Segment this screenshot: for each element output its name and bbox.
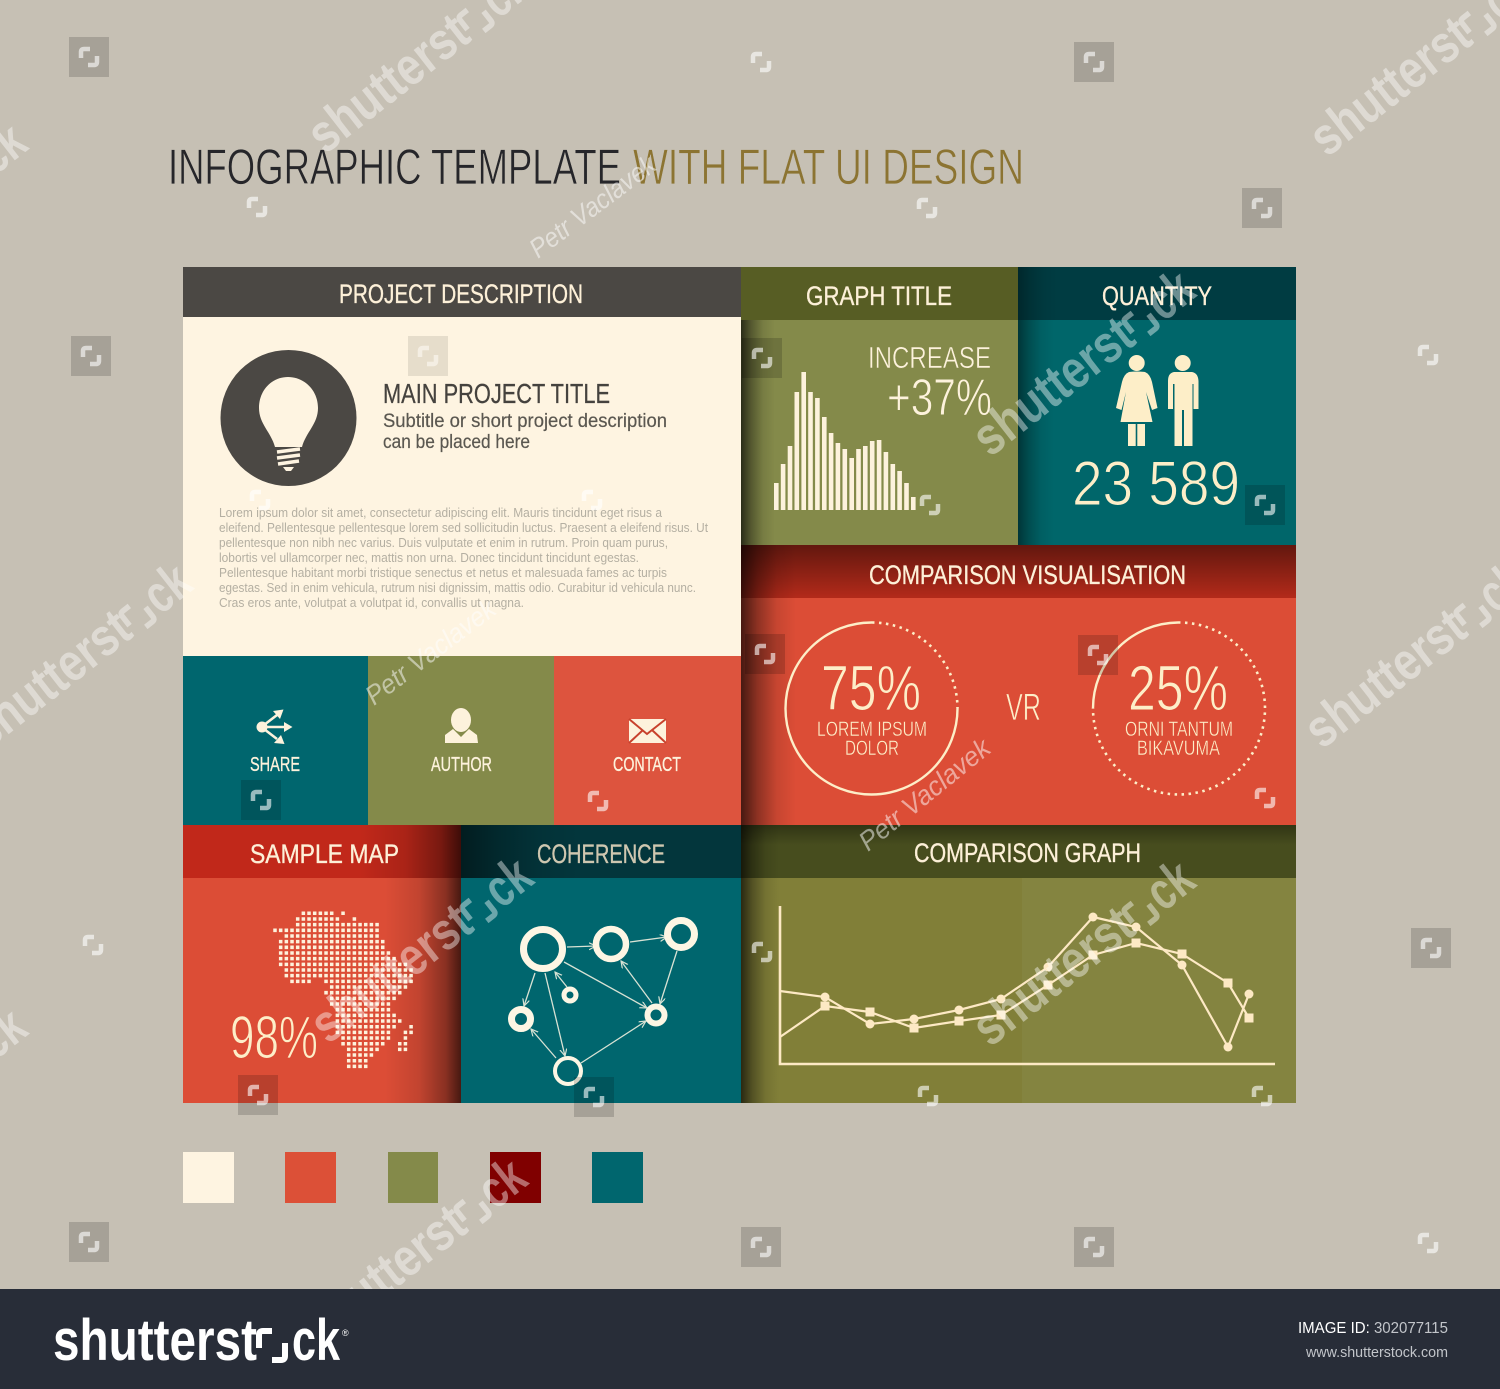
donut: 25 percent: BIKAVUMA [1137,737,1220,760]
panel: quantity [1018,267,1296,545]
watermark: diagonal wordmarks: Petr Vaclavek [524,149,662,264]
heading: project description [183,267,741,317]
panel: coherence [461,825,741,1103]
watermark: diagonal wordmarks: ck [131,551,203,625]
label: author: AUTHOR [431,754,492,776]
icon: author [445,708,478,743]
subtitle [383,411,667,453]
icon: envelope [629,719,666,743]
donut: 75 percent: 75% [821,652,921,724]
heading: comparison graph: COMPARISON GRAPH [914,838,1141,868]
body text: Cras eros ante, volutpat a volutpat id, convallis ut magna. [219,595,524,610]
donut: 75 percent [786,622,958,794]
body text [219,505,708,610]
body text: pellentesque non nibh nec varius. Duis vulputate et enim in rutrum. Proin quam purus, [219,535,668,550]
panel: project description: PROJECT DESCRIPTION [339,279,583,309]
footer bar [0,1289,1500,1389]
body text: Pellentesque habitant morbi tristique senectus et netus et malesuada fames ac turpis [219,565,667,580]
panel: project description [183,267,741,656]
footer logo: ® [342,1328,349,1338]
title: INFOGRAPHIC TEMPLATE [168,139,621,195]
label: versus: VR [1006,687,1041,729]
subtitle: can be placed here [383,432,530,453]
label: contact: CONTACT [613,754,681,776]
icon: woman and man [1116,355,1198,446]
watermark: diagonal wordmarks: Petr Vaclavek [853,732,997,857]
donut: 25 percent: ORNI TANTUM [1125,718,1233,741]
watermark: diagonal wordmarks: shutterst [961,895,1145,1057]
donut: 75 percent: LOREM IPSUM [817,718,927,741]
quantity number: 23 589 [1072,449,1240,519]
heading: sample map: SAMPLE MAP [250,839,399,869]
footer logo: shutterst [53,1308,257,1373]
watermark: diagonal wordmarks: ck [472,845,544,919]
panel: comparison graph [741,825,1296,1103]
body text: eleifend. Pellentesque pellentesque lorem sed sollicitudin luctus. Praesent a eleifend risus. Ut [219,520,708,535]
dotted map of africa [273,913,413,1066]
bar chart [774,372,916,510]
panel: author tile [368,656,554,825]
panel: sample map [183,825,461,1103]
line chart [780,906,1275,1064]
panel: graph title [741,267,1018,545]
heading: comparison visualisation: COMPARISON VISUALISATION [869,560,1186,590]
label: share: SHARE [250,754,300,776]
donut: 25 percent: 25% [1128,652,1228,724]
heading: quantity: QUANTITY [1102,281,1212,311]
watermark: diagonal wordmarks: shutterst [293,1193,477,1355]
map percentage: 98% [230,1004,318,1071]
footer logo: ck [292,1308,341,1373]
watermark: diagonal wordmarks: ck [466,1146,538,1220]
colour swatches [183,1152,643,1203]
watermark: diagonal wordmarks: shutterst [299,892,483,1054]
network diagram [512,920,694,1084]
body text: Lorem ipsum dolor sit amet, consectetur adipiscing elit. Mauris tincidunt eget risus a [219,505,663,520]
donut: 25 percent [1093,622,1265,794]
panel: comparison visualisation [741,545,1296,825]
heading: graph title: GRAPH TITLE [806,281,952,311]
icon: share [256,710,292,744]
watermark: diagonal wordmarks: shutterst [961,305,1145,467]
body text: lobortis vel ullamcorper nec, mattis non urna. Donec tincidunt tincidunt egestas. [219,550,639,565]
body text: egestas. Sed in enim vehicula, rutrum nisi dignissim, mattis odio. Curabitur id vehicula nunc. [219,580,696,595]
panel: contact tile [554,656,741,825]
subtitle: Subtitle or short project description [383,411,667,432]
panel: share tile [183,656,368,825]
increase label: INCREASE [868,340,991,375]
watermark: diagonal wordmarks: Petr Vaclavek [360,593,503,711]
site url: www.shutterstock.com [1305,1344,1448,1361]
watermark: diagonal wordmarks: ck [1134,258,1206,332]
image id: IMAGE ID: 302077115 [1298,1320,1448,1337]
main project title: MAIN PROJECT TITLE [383,378,610,409]
title: WITH FLAT UI DESIGN [633,139,1024,195]
watermark: diagonal wordmarks: ck [1134,848,1206,922]
icon: light bulb [220,350,356,486]
donut: 75 percent: DOLOR [845,737,899,760]
increase value: +37% [887,369,992,427]
heading: coherence: COHERENCE [537,839,665,869]
